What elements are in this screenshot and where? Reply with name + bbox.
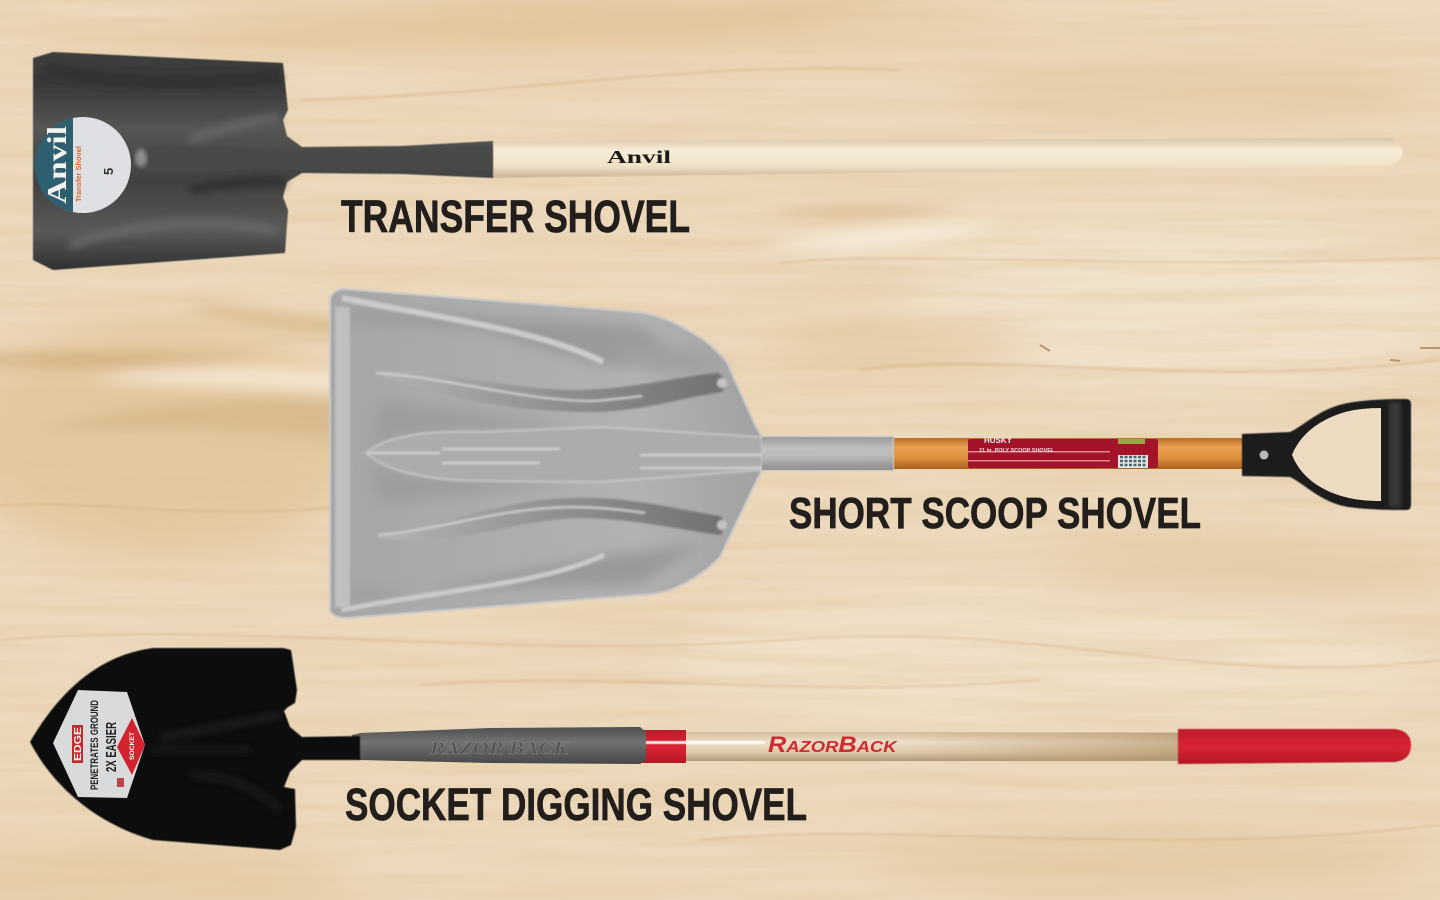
handle brand: RazorBack: RAZORBACK bbox=[768, 733, 898, 758]
handle darker midsection bbox=[900, 733, 1180, 760]
label: transfer shovel: TRANSFER SHOVEL bbox=[341, 191, 690, 242]
barcode bbox=[1118, 455, 1148, 468]
grip bar highlight bbox=[1389, 402, 1401, 507]
plastic scoop blade bbox=[330, 289, 893, 618]
brand text: EDGE bbox=[73, 727, 84, 761]
flag bbox=[117, 778, 124, 787]
silver socket bbox=[762, 437, 893, 470]
socket ridge bbox=[132, 145, 492, 172]
label product name: Transfer Shovel bbox=[76, 146, 83, 202]
label size: 5 bbox=[101, 168, 116, 175]
upper curved rib bbox=[373, 371, 727, 412]
wood knots bbox=[1040, 345, 1440, 361]
outer lower rib bbox=[342, 555, 604, 610]
orange handle bbox=[890, 438, 1246, 469]
label headline 2: 2X EASIER bbox=[103, 722, 120, 772]
front lip bbox=[335, 307, 350, 607]
red grip bbox=[1178, 729, 1411, 764]
steel blade bbox=[33, 52, 493, 270]
handle brand: Anvil: Anvil bbox=[607, 147, 671, 167]
socket tip highlight bbox=[135, 149, 147, 167]
embossed brand on socket: RAZOR BACK bbox=[429, 738, 570, 758]
rivet bbox=[1260, 450, 1268, 460]
brand badge bbox=[72, 725, 83, 763]
blade highlights bbox=[45, 68, 285, 245]
hexagon label bbox=[53, 690, 145, 798]
circular label bbox=[35, 117, 131, 213]
socket rim bbox=[179, 147, 181, 171]
label brand: Anvil bbox=[42, 125, 72, 204]
label product text: 21 in. POLY SCOOP SHOVEL bbox=[979, 448, 1055, 454]
spine highlights bbox=[368, 449, 893, 468]
label headline: PENETRATES GROUND bbox=[89, 700, 101, 790]
central spine bbox=[366, 427, 762, 482]
blade sheen bbox=[150, 715, 280, 810]
badge text: SOCKET bbox=[130, 732, 136, 760]
red collar bbox=[642, 730, 686, 763]
label: short scoop shovel: SHORT SCOOP SHOVEL bbox=[789, 489, 1201, 538]
red handle label bbox=[968, 436, 1158, 468]
wood handle bbox=[492, 138, 1403, 178]
blade shading bbox=[345, 310, 730, 600]
socket digging shovel bbox=[30, 648, 1411, 850]
D-grip handle bbox=[1242, 399, 1411, 510]
wood handle bbox=[680, 732, 1185, 761]
grey socket wrap bbox=[352, 727, 646, 764]
transfer shovel bbox=[33, 52, 1403, 270]
red diamond badge bbox=[117, 718, 145, 775]
label brand: HUSKY bbox=[984, 436, 1013, 445]
lower curved rib bbox=[376, 498, 727, 541]
black blade bbox=[30, 648, 360, 850]
label: socket digging shovel: SOCKET DIGGING SHOVEL bbox=[345, 779, 807, 830]
short scoop shovel bbox=[330, 289, 1411, 618]
D-grip opening bbox=[1292, 408, 1381, 501]
white stripe bbox=[645, 741, 765, 744]
outer upper rib bbox=[342, 298, 603, 362]
